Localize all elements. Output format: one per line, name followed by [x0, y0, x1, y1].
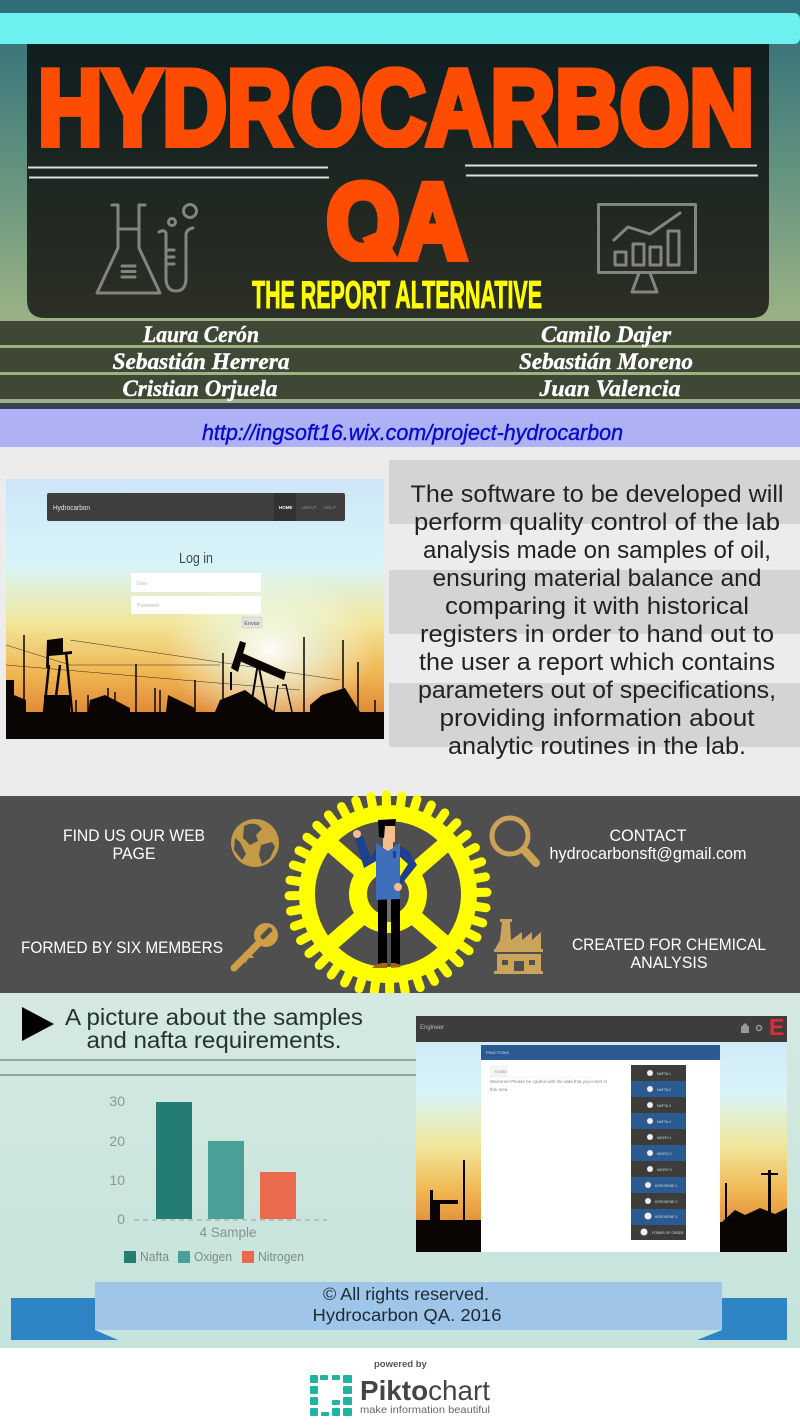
bar chart: 20 — [109, 1133, 125, 1149]
team names band: Camilo Dajer — [541, 322, 672, 347]
title panel — [27, 44, 769, 318]
intro section background — [0, 447, 800, 796]
piktochart branding — [310, 1359, 490, 1416]
silhouettes — [416, 1160, 787, 1252]
fact: web page — [63, 826, 205, 863]
team names band: Laura Cerón — [142, 322, 259, 347]
title: QA: QA — [327, 163, 466, 281]
team names band: Sebastián Herrera — [112, 349, 290, 374]
text block: software description: parameters out of specifications, — [418, 677, 776, 704]
heading rules — [0, 1060, 416, 1075]
fact: web page: FIND US OUR WEB — [63, 826, 205, 845]
team names band — [0, 321, 800, 409]
fact: chemical analysis — [572, 935, 766, 972]
fact: contact — [550, 826, 746, 863]
content card: HOME — [495, 1069, 507, 1074]
footer ribbon: Hydrocarbon QA. 2016 — [312, 1305, 502, 1325]
text block: software description — [389, 460, 800, 760]
title rules left — [28, 168, 329, 178]
icon: lab flask and test tube — [97, 204, 196, 293]
text block: software description: perform quality control of the lab — [414, 509, 780, 536]
lower section background — [0, 993, 800, 1348]
app header: E — [769, 1014, 784, 1040]
text block: software description: the user a report which contains — [419, 649, 775, 676]
chart legend: Nitrogen — [258, 1250, 304, 1264]
side menu: MICRO 3 — [657, 1168, 672, 1172]
text block: software description: The software to be developed will — [410, 481, 784, 508]
login form: Enviar — [244, 621, 260, 627]
team names band: Cristian Orjuela — [122, 376, 278, 401]
fact: contact: CONTACT — [610, 826, 686, 845]
heading: samples picture — [22, 1004, 363, 1053]
dark facts panel — [0, 795, 800, 993]
icon: key — [234, 923, 278, 968]
cyan top band — [0, 13, 800, 44]
page background: header gradient — [0, 0, 800, 321]
bar chart — [109, 1093, 327, 1264]
piktochart branding: make information beautiful — [360, 1404, 490, 1416]
side menu: KEROSENE 3 — [655, 1215, 677, 1219]
login form: Log in — [179, 550, 213, 567]
bar chart: 10 — [109, 1172, 125, 1188]
text block: software description: providing information about — [440, 705, 755, 732]
side menu — [631, 1065, 686, 1240]
bar chart: 30 — [109, 1093, 125, 1109]
gear — [289, 795, 487, 993]
side menu: FORMS OF CRUDE — [652, 1231, 685, 1235]
heading: samples picture: A picture about the samples — [65, 1004, 363, 1030]
white footer — [0, 1348, 800, 1428]
login navbar: HOME — [279, 505, 292, 510]
login form — [131, 550, 262, 628]
footer ribbon: © All rights reserved. — [323, 1284, 489, 1304]
text block: software description: analysis made on samples of oil, — [423, 537, 771, 564]
piktochart logo mark — [310, 1375, 352, 1416]
side menu: MICRO 2 — [657, 1152, 672, 1156]
login form: User — [137, 581, 148, 587]
fact: chemical analysis: ANALYSIS — [630, 953, 708, 972]
side menu: KEROSENE 2 — [655, 1200, 677, 1204]
icon: monitor with chart — [598, 204, 696, 292]
title: QA — [326, 180, 469, 262]
side menu: NAFTA 4 — [657, 1120, 671, 1124]
url bar — [0, 409, 800, 447]
screenshot: login page — [6, 479, 384, 739]
icon: play triangle — [22, 1007, 54, 1041]
text block: software description: analytic routines in the lab. — [448, 733, 746, 760]
login navbar — [47, 493, 345, 521]
side menu: NAFTA 3 — [657, 1104, 671, 1108]
bar chart: 4 Sample — [199, 1225, 257, 1240]
chart legend: Nafta — [140, 1250, 169, 1264]
content card: this area — [490, 1087, 508, 1092]
side menu: KEROSENE 1 — [655, 1184, 677, 1188]
icon: factory — [494, 919, 543, 974]
content card: FRACTIONS — [486, 1050, 509, 1055]
login navbar: ABOUT — [301, 505, 317, 510]
piktochart wordmark: Piktochart — [360, 1375, 490, 1406]
side menu: NAFTA 1 — [657, 1072, 671, 1076]
oil pump silhouettes — [6, 635, 384, 739]
text block: software description: comparing it with historical — [445, 593, 749, 620]
chart legend — [124, 1250, 304, 1264]
person figure — [353, 819, 417, 968]
login navbar: HELP — [324, 505, 336, 510]
login form: Password — [137, 603, 159, 609]
heading: samples picture: and nafta requirements. — [86, 1027, 342, 1053]
bar chart: 0 — [117, 1211, 125, 1227]
piktochart branding: powered by — [374, 1359, 428, 1370]
title rules right — [465, 166, 758, 176]
side menu: MICRO 1 — [657, 1136, 672, 1140]
fact: contact: hydrocarbonsft@gmail.com — [550, 844, 746, 863]
subtitle: THE REPORT ALTERNATIVE — [252, 274, 542, 317]
login navbar: Hydrocarbon — [53, 503, 90, 512]
app header — [416, 1014, 787, 1042]
app header: Engineer — [420, 1025, 444, 1031]
chart legend: Oxigen — [194, 1250, 232, 1264]
team names band: Juan Valencia — [538, 376, 680, 401]
text block: software description: registers in order to hand out to — [420, 621, 774, 648]
team names band: Sebastián Moreno — [519, 349, 693, 374]
fact: web page: PAGE — [112, 844, 156, 863]
screenshot: engineer page — [416, 1014, 787, 1252]
icon: magnifier — [492, 818, 536, 863]
text block: software description: ensuring material balance and — [432, 565, 762, 592]
content card: Welcome! Please be careful with the data that you insert in — [490, 1079, 607, 1084]
fact: members: FORMED BY SIX MEMBERS — [21, 938, 223, 957]
url bar: http://ingsoft16.wix.com/project-hydrocarbon — [202, 420, 623, 445]
footer ribbon — [11, 1282, 787, 1340]
fact: chemical analysis: CREATED FOR CHEMICAL — [572, 935, 766, 954]
side menu: NAFTA 2 — [657, 1088, 671, 1092]
content card — [481, 1045, 720, 1252]
icon: globe — [231, 819, 279, 867]
